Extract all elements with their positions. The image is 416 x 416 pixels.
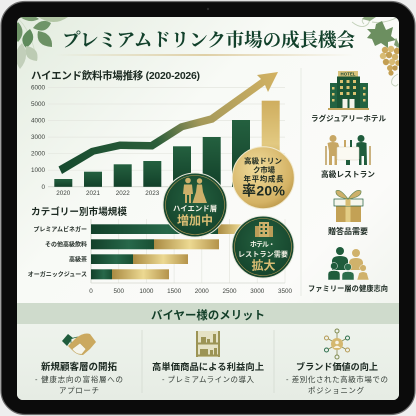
benefits heading: バイヤー様のメリット — [151, 308, 265, 322]
y axis labels: 1000 — [31, 167, 45, 174]
label: family health: ファミリー層の健康志向 — [308, 284, 388, 293]
x axis labels: 2022 — [116, 190, 130, 197]
value axis labels — [89, 288, 292, 295]
benefit two: 高単価商品による利益向上 — [152, 361, 264, 372]
category bar chart panel — [28, 206, 292, 295]
y axis labels — [31, 84, 45, 191]
icon: family — [328, 247, 369, 280]
badge: CAGR 20 percent: 年平均成長 — [244, 174, 284, 184]
y axis labels: 0 — [41, 184, 45, 191]
x axis labels: 2023 — [145, 190, 160, 197]
value axis labels: 500 — [113, 288, 124, 295]
value axis labels: 2000 — [195, 288, 209, 295]
stacked bars — [91, 224, 260, 279]
benefit one: アプローチ — [59, 386, 99, 395]
icon: hotel: HOTEL — [341, 72, 356, 77]
value axis labels: 2500 — [222, 288, 237, 295]
bars 2020 to 2026 — [54, 101, 280, 187]
benefit three: - 差別化された高級市場での — [286, 374, 388, 384]
y axis labels: 6000 — [31, 84, 45, 92]
panel: demand drivers — [301, 68, 388, 296]
category labels: その他高級飲料 — [45, 240, 87, 248]
chart heading: ハイエンド飲料市場推移 (2020-2026) — [31, 69, 200, 82]
badge: hotel and restaurant demand — [232, 216, 294, 278]
value axis labels: 1500 — [167, 288, 182, 295]
category labels — [28, 225, 87, 278]
badge: hotel and restaurant demand: ホテル・ — [250, 240, 275, 248]
category labels: プレミアムビネガー — [33, 225, 87, 233]
badge: CAGR 20 percent: 率20% — [242, 182, 286, 198]
panel: buyer benefits — [17, 303, 399, 400]
y axis labels: 4000 — [31, 118, 45, 125]
line and bar chart panel — [31, 69, 285, 197]
title: プレミアムドリンク市場の成長機会 — [62, 30, 355, 52]
icon: gold hotel — [255, 222, 273, 237]
badge: high-end segment: ハイエンド層 — [173, 204, 217, 213]
benefit two — [152, 331, 264, 384]
badge: CAGR 20 percent — [232, 147, 294, 209]
badge: high-end segment — [163, 173, 227, 237]
category heading: カテゴリー別市場規模 — [31, 206, 127, 218]
x axis labels: 2020 — [56, 190, 71, 197]
benefit one: 新規顧客層の開拓 — [41, 361, 117, 373]
benefit three: ブランド価値の向上 — [296, 361, 378, 372]
badge: high-end segment: 増加中 — [177, 212, 213, 228]
decorative vine, grape leaf and grapes top right — [352, 15, 401, 86]
value axis labels: 1000 — [139, 288, 154, 295]
y axis labels: 3000 — [31, 134, 45, 141]
title gold rule — [55, 54, 355, 56]
icon: hotel — [328, 71, 369, 110]
benefit one — [35, 334, 123, 395]
benefits heading band — [17, 303, 399, 324]
label: luxury hotel: ラグジュアリーホテル — [311, 113, 386, 123]
x axis labels — [56, 190, 160, 197]
benefit two: - プレミアムラインの導入 — [162, 374, 254, 384]
icon: gift — [334, 190, 363, 222]
icon: couple — [183, 178, 207, 203]
decorative leaves top left — [17, 17, 68, 69]
category labels: 高級茶 — [69, 255, 87, 263]
x axis labels: 2021 — [86, 190, 100, 197]
badge: hotel and restaurant demand: 拡大 — [252, 258, 276, 272]
value axis labels: 3500 — [278, 288, 292, 295]
category labels: オーガニックジュース — [28, 270, 87, 278]
badge: CAGR 20 percent: ク市場 — [253, 164, 276, 174]
value axis labels: 0 — [89, 288, 93, 295]
icon: fine dining — [326, 135, 370, 165]
icon: network — [324, 329, 350, 359]
label: gift demand: 贈答品需要 — [328, 226, 368, 236]
icon: handshake — [62, 334, 96, 355]
value axis labels: 3000 — [250, 288, 265, 295]
benefit three: ポジショニング — [308, 385, 364, 395]
benefit one: - 健康志向の富裕層への — [35, 374, 123, 384]
camera dot — [207, 8, 209, 10]
badge: CAGR 20 percent: 高級ドリン — [244, 156, 282, 166]
growth arrow — [58, 72, 278, 174]
badge: hotel and restaurant demand: レストラン需要 — [238, 250, 288, 258]
y axis labels: 5000 — [31, 101, 45, 108]
label: fine dining: 高級レストラン — [321, 169, 375, 179]
icon: product shelf — [196, 331, 220, 357]
y axis labels: 2000 — [31, 151, 45, 158]
benefit three — [286, 329, 388, 395]
